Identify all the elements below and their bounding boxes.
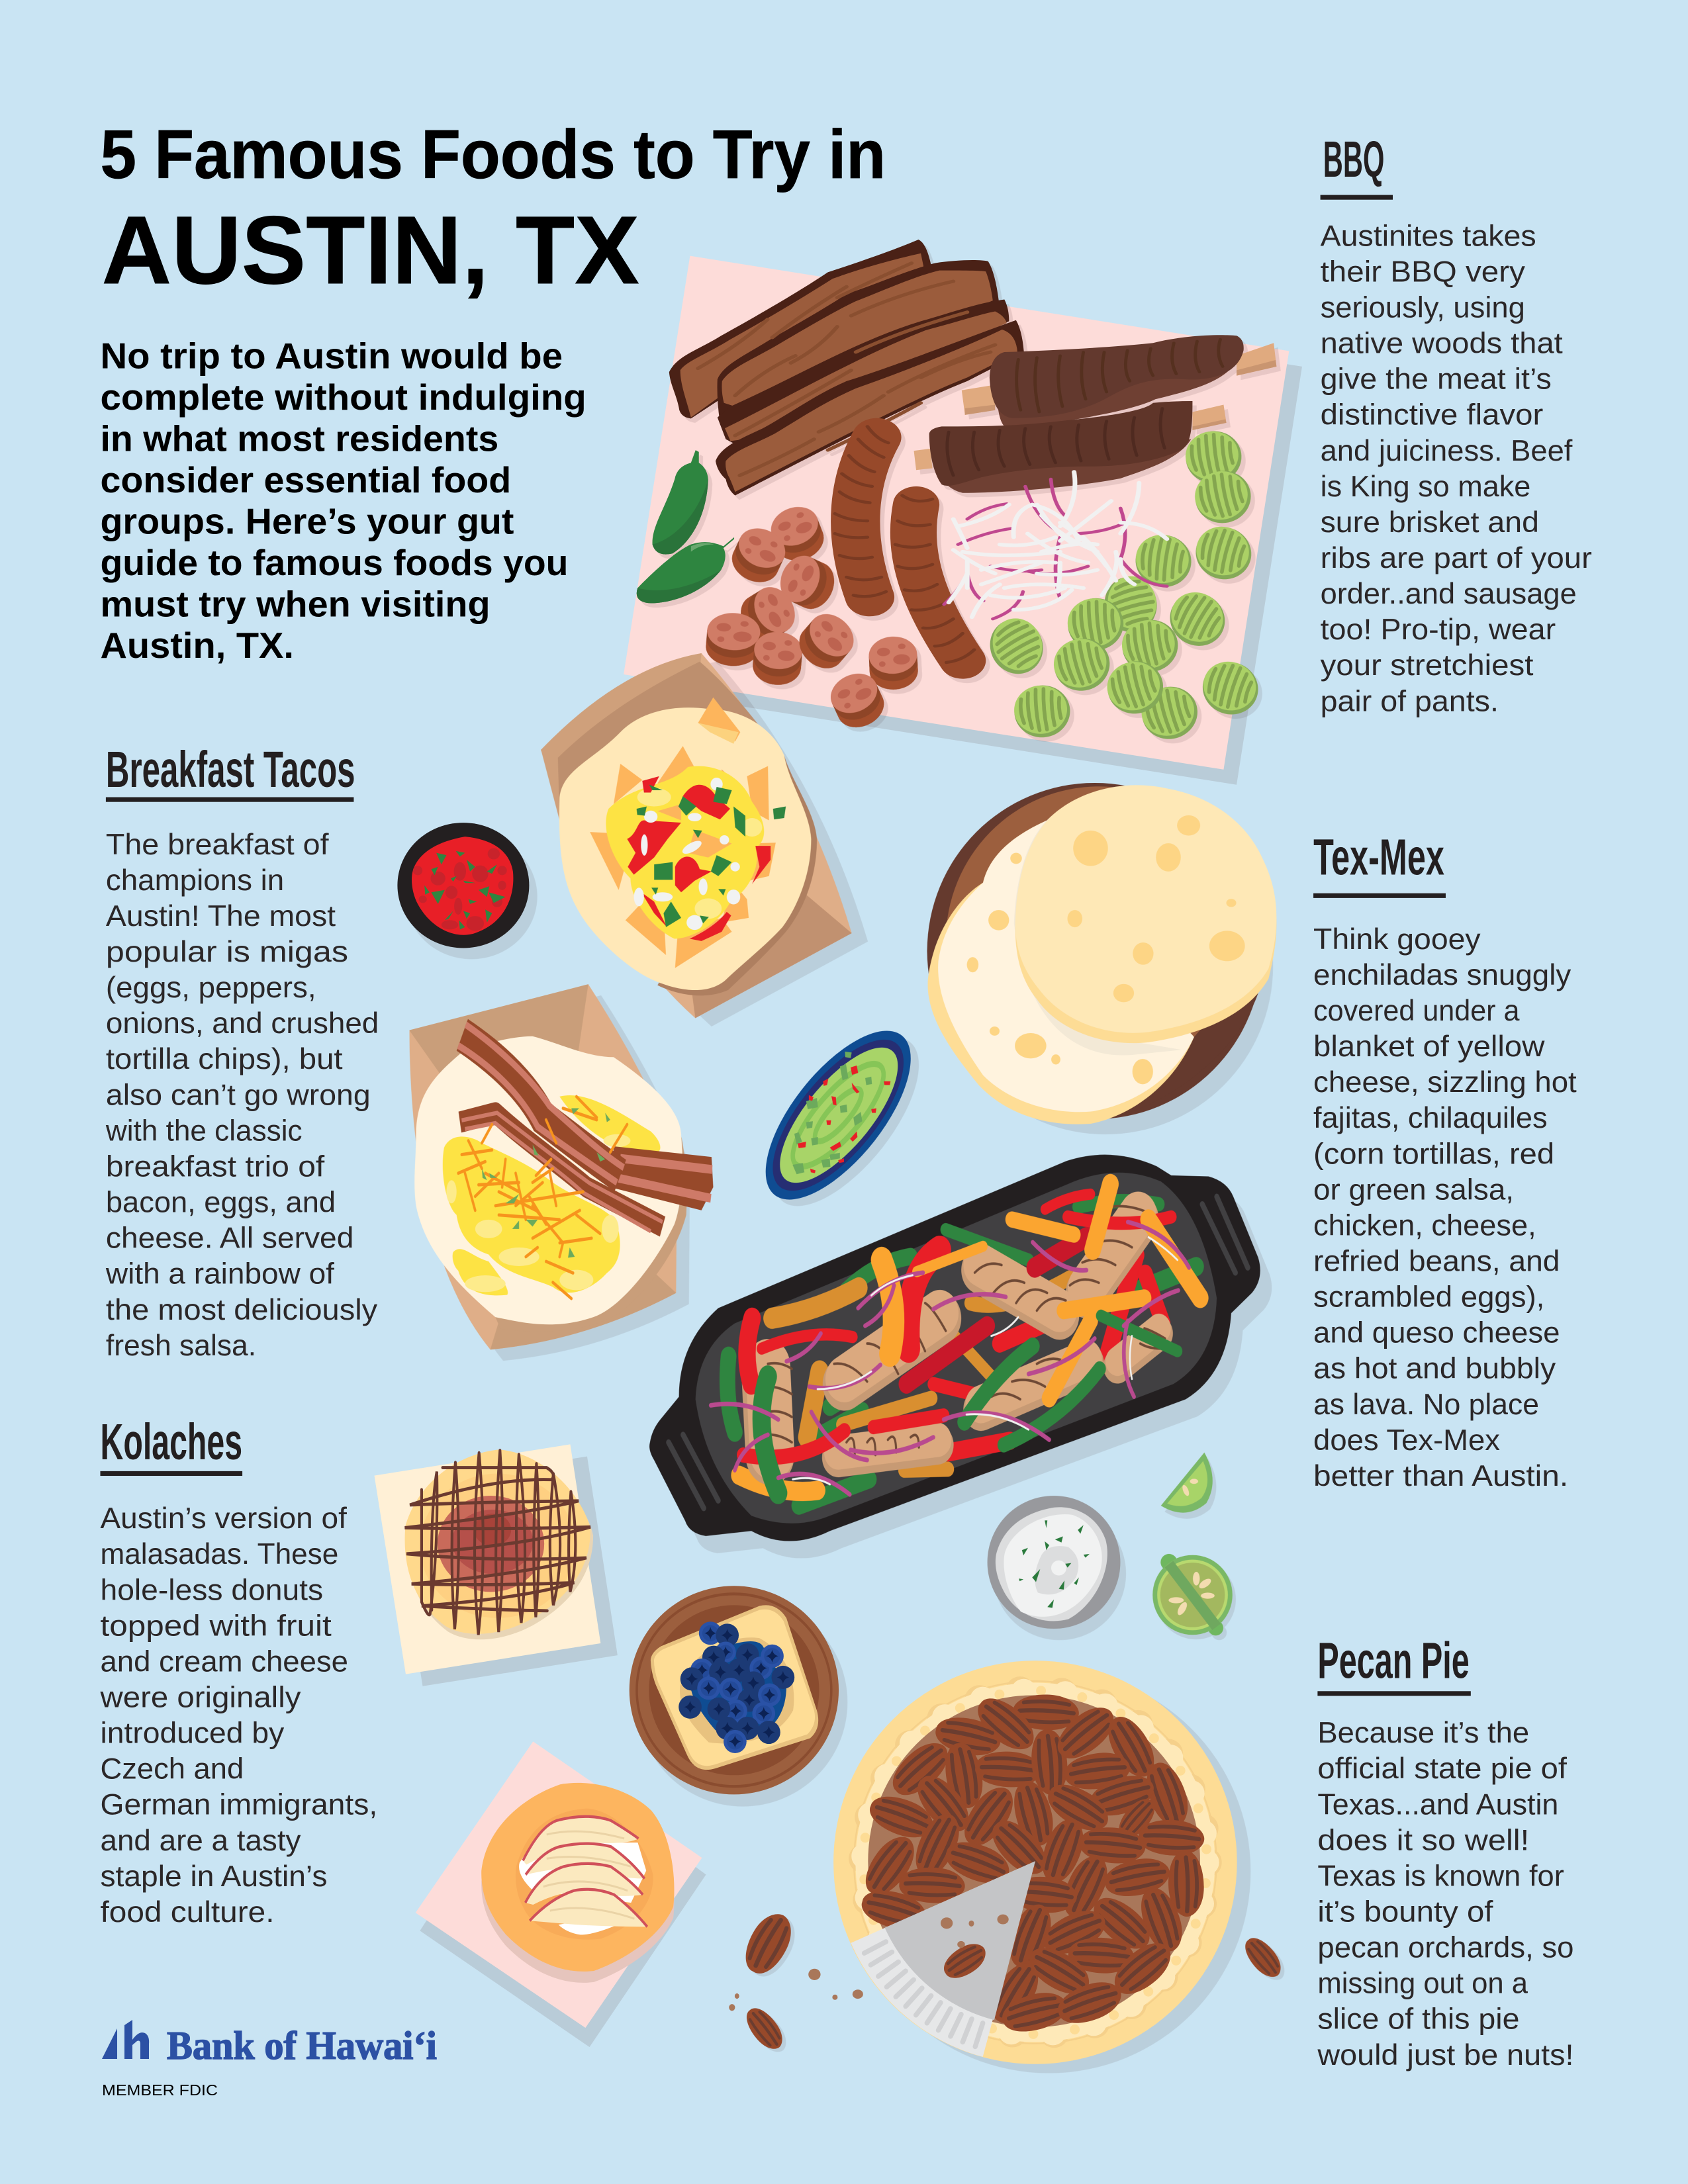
- text: Breakfast Tacos: onions, and crushed: [106, 1007, 379, 1040]
- text: Breakfast Tacos: tortilla chips), but: [106, 1043, 343, 1075]
- text: Tex-Mex: (corn tortillas, red: [1313, 1138, 1554, 1170]
- bacon and egg taco: [409, 984, 713, 1349]
- text: Kolaches: Czech and: [100, 1753, 244, 1786]
- text: Tex-Mex: refried beans, and: [1313, 1246, 1560, 1278]
- text: Kolaches: and are a tasty: [100, 1825, 301, 1857]
- pie crust: [833, 1661, 1237, 2064]
- red onion pile: [944, 472, 1167, 619]
- text: BBQ: seriously, using: [1321, 292, 1525, 324]
- text: BBQ: distinctive flavor: [1321, 399, 1543, 432]
- intro paragraph: must try when visiting: [100, 583, 491, 624]
- text: Kolaches: malasadas. These: [100, 1538, 338, 1570]
- text: Breakfast Tacos: champions in: [106, 864, 284, 897]
- text: Tex-Mex: Think gooey: [1313, 923, 1481, 956]
- text: Kolaches: German immigrants,: [100, 1789, 377, 1821]
- illustration: pecan pie, sour cream and lime: [729, 1496, 1287, 2064]
- intro paragraph: guide to famous foods you: [100, 542, 568, 583]
- pickles: [980, 428, 1265, 745]
- scrambled eggs: [559, 1095, 660, 1153]
- chips: [590, 698, 776, 968]
- text: Tex-Mex: [1313, 923, 1577, 1492]
- board with shadow: [624, 256, 1302, 785]
- text: Breakfast Tacos: The breakfast of: [106, 829, 329, 861]
- intro paragraph: in what most residents: [100, 418, 498, 459]
- heading: Pecan Pie: Pecan Pie: [1317, 1632, 1470, 1689]
- pecans in pie: [857, 1690, 1205, 2038]
- text: Breakfast Tacos: with the classic: [105, 1115, 303, 1147]
- text: Kolaches: were originally: [99, 1682, 301, 1714]
- beef ribs: [914, 335, 1276, 493]
- text: Kolaches: food culture.: [100, 1896, 274, 1929]
- cilantro: [637, 785, 786, 927]
- text: Pecan Pie: Texas...and Austin: [1317, 1788, 1558, 1821]
- intro paragraph: groups. Here’s your gut: [100, 500, 514, 541]
- text: BBQ: give the meat it’s: [1321, 363, 1552, 396]
- logo mark: [102, 2020, 149, 2059]
- text: Breakfast Tacos: with a rainbow of: [105, 1258, 335, 1291]
- paper wrapper: [409, 984, 677, 1349]
- text layer: [99, 116, 1592, 2071]
- fajita skillet: [649, 1155, 1260, 1541]
- text: BBQ: native woods that: [1321, 328, 1563, 360]
- tortilla toast spots: [967, 815, 1245, 1084]
- intro paragraph: Austin, TX.: [100, 625, 294, 666]
- text: BBQ: ribs are part of your: [1321, 542, 1592, 574]
- text: Kolaches: introduced by: [100, 1717, 284, 1750]
- text: Pecan Pie: [1317, 1717, 1574, 2071]
- text: Tex-Mex: blanket of yellow: [1313, 1030, 1544, 1063]
- heading: Pecan Pie: [1317, 1632, 1471, 1696]
- text: Breakfast Tacos: bacon, eggs, and: [106, 1187, 336, 1219]
- tortillas on plate: [927, 783, 1276, 1124]
- salsa bowl: [397, 823, 529, 948]
- text: Tex-Mex: enchiladas snuggly: [1313, 959, 1571, 991]
- migas taco: [541, 653, 852, 1018]
- logo wordmark: Bank of Hawai‘i: [167, 2024, 437, 2068]
- text: Pecan Pie: official state pie of: [1317, 1752, 1568, 1785]
- illustration: kolaches: [375, 1444, 839, 2047]
- text: Pecan Pie: pecan orchards, so: [1317, 1932, 1574, 1964]
- text: BBQ: sure brisket and: [1321, 506, 1539, 539]
- blueberries: [679, 1621, 794, 1753]
- heading: BBQ: BBQ: [1323, 131, 1384, 188]
- text: Kolaches: [99, 1502, 377, 1929]
- text: Tex-Mex: as lava. No place: [1313, 1388, 1539, 1421]
- text: Tex-Mex: and queso cheese: [1313, 1317, 1560, 1349]
- text: Tex-Mex: as hot and bubbly: [1313, 1353, 1556, 1385]
- text: Kolaches: topped with fruit: [100, 1610, 332, 1642]
- text: Breakfast Tacos: breakfast trio of: [106, 1150, 325, 1183]
- text: Kolaches: Austin’s version of: [100, 1502, 348, 1535]
- intro paragraph: consider essential food: [100, 459, 511, 500]
- cheese bits: [634, 778, 740, 930]
- text: Pecan Pie: missing out on a: [1317, 1968, 1528, 2000]
- text: Pecan Pie: would just be nuts!: [1317, 2039, 1574, 2071]
- egg: [606, 766, 764, 938]
- intro paragraph: [100, 336, 586, 666]
- apple kolache: [416, 1741, 706, 2047]
- text: Breakfast Tacos: also can’t go wrong: [106, 1079, 371, 1111]
- heading: Breakfast Tacos: Breakfast Tacos: [106, 741, 355, 798]
- text: Tex-Mex: chicken, cheese,: [1313, 1209, 1536, 1242]
- heading: Breakfast Tacos: [106, 741, 355, 802]
- blueberry kolache on plate: [630, 1586, 839, 1794]
- text: Breakfast Tacos: popular is migas: [106, 936, 348, 968]
- salsa cup: [397, 823, 529, 948]
- text: BBQ: is King so make: [1321, 471, 1530, 503]
- sausages: [835, 426, 974, 662]
- heading: Kolaches: [100, 1414, 242, 1476]
- paper wrapper: [541, 653, 852, 1018]
- tortilla: [495, 1136, 686, 1332]
- text: BBQ: too! Pro-tip, wear: [1321, 614, 1556, 646]
- text: Tex-Mex: better than Austin.: [1313, 1460, 1568, 1492]
- text: Pecan Pie: it’s bounty of: [1317, 1896, 1493, 1929]
- sausage slices: [704, 500, 919, 735]
- title: [100, 116, 886, 304]
- text: Kolaches: staple in Austin’s: [100, 1860, 327, 1893]
- intro paragraph: No trip to Austin would be: [100, 336, 563, 377]
- text: Pecan Pie: does it so well!: [1317, 1824, 1529, 1856]
- fajita vegetables and chicken: [711, 1184, 1200, 1506]
- text: BBQ: Austinites takes: [1321, 220, 1536, 252]
- text: Kolaches: and cream cheese: [100, 1645, 348, 1678]
- text: Kolaches: hole-less donuts: [100, 1574, 323, 1606]
- text: Pecan Pie: slice of this pie: [1317, 2003, 1519, 2036]
- illustration: BBQ board: [624, 240, 1302, 785]
- heading: BBQ: [1321, 131, 1393, 200]
- loose pecans and crumbs: [729, 1907, 1287, 2055]
- peppers: [627, 776, 771, 941]
- text: Tex-Mex: fajitas, chilaquiles: [1313, 1102, 1548, 1134]
- illustration: breakfast tacos, salsa and guacamole: [397, 653, 930, 1349]
- jalapenos: [637, 450, 734, 604]
- text: Breakfast Tacos: (eggs, peppers,: [106, 972, 316, 1004]
- text: Breakfast Tacos: [105, 829, 379, 1362]
- logo: Bank of Hawai'i: [102, 2020, 437, 2068]
- text: BBQ: and juiciness. Beef: [1321, 435, 1573, 467]
- text: Breakfast Tacos: fresh salsa.: [106, 1330, 256, 1362]
- text: BBQ: [1321, 220, 1592, 717]
- lime half: [1152, 1554, 1233, 1635]
- missing slice: [851, 1861, 1035, 2057]
- heading: Kolaches: Kolaches: [100, 1414, 242, 1471]
- lime wedge: [1161, 1453, 1213, 1513]
- shredded cheese: [458, 1097, 627, 1298]
- sour cream cup: [988, 1496, 1120, 1629]
- title: AUSTIN, TX: [102, 196, 639, 304]
- text: Tex-Mex: does Tex-Mex: [1313, 1424, 1500, 1457]
- title: 5 Famous Foods to Try in: [100, 116, 886, 193]
- bacon strips: [460, 1113, 663, 1231]
- guacamole dish: [746, 1001, 930, 1230]
- text: BBQ: your stretchiest: [1321, 649, 1534, 682]
- tortilla: [559, 707, 811, 990]
- text: BBQ: order..and sausage: [1321, 578, 1577, 610]
- text: Breakfast Tacos: the most deliciously: [106, 1294, 377, 1326]
- text: Tex-Mex: scrambled eggs),: [1313, 1281, 1544, 1314]
- intro paragraph: complete without indulging: [100, 377, 586, 418]
- text: Pecan Pie: Because it’s the: [1317, 1717, 1529, 1749]
- text: Tex-Mex: covered under a: [1313, 995, 1520, 1027]
- illustration: tex-mex tortillas and fajita skillet: [649, 783, 1276, 1541]
- heading: Tex-Mex: Tex-Mex: [1313, 829, 1444, 886]
- heading: Tex-Mex: [1313, 829, 1446, 898]
- fruit and chocolate kolache: [375, 1444, 618, 1686]
- text: Tex-Mex: or green salsa,: [1313, 1173, 1514, 1206]
- member FDIC: MEMBER FDIC: [102, 2081, 218, 2099]
- apple slices: [523, 1817, 647, 1927]
- text: Pecan Pie: Texas is known for: [1317, 1860, 1564, 1892]
- text: Tex-Mex: cheese, sizzling hot: [1313, 1066, 1577, 1099]
- text: BBQ: pair of pants.: [1321, 685, 1499, 717]
- text: Breakfast Tacos: Austin! The most: [106, 900, 336, 933]
- text: BBQ: their BBQ very: [1321, 255, 1525, 288]
- text: Breakfast Tacos: cheese. All served: [106, 1222, 353, 1255]
- brisket slices: [669, 240, 1024, 496]
